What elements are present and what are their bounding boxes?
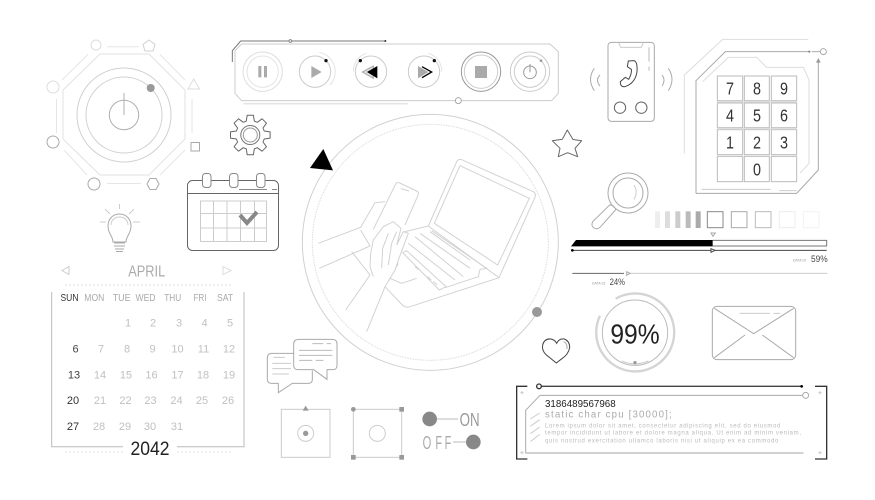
date grid: 2 <box>150 318 156 330</box>
forward button <box>408 53 442 87</box>
central laptop illustration <box>302 114 558 370</box>
99 percent gauge <box>596 293 674 371</box>
heart, gauge, envelope and text panel <box>517 293 827 459</box>
date grid: 15 <box>120 370 132 382</box>
bulb icon <box>100 204 140 252</box>
play button <box>299 52 335 87</box>
progress line 24%: 24% <box>610 277 625 287</box>
keys <box>717 76 797 182</box>
laptop <box>385 159 535 307</box>
date grid: 3 <box>176 318 182 330</box>
weekday headers <box>60 292 233 304</box>
key digits: 0 <box>753 159 761 179</box>
date grid: 16 <box>145 370 158 382</box>
rewind button <box>353 53 387 87</box>
date grid: 31 <box>171 421 183 433</box>
weekday headers: FRI <box>194 292 206 304</box>
date grid: 30 <box>144 421 156 433</box>
text panel: static char cpu [30000]; <box>545 410 672 421</box>
chat bubbles <box>267 339 337 393</box>
date grid: 17 <box>171 370 184 382</box>
phone icon <box>590 42 672 121</box>
year: 2042 <box>130 439 170 460</box>
key digits: 5 <box>753 106 761 126</box>
date grid: 21 <box>94 395 106 407</box>
off toggle: F <box>435 432 442 453</box>
date grid: 23 <box>144 395 157 407</box>
weekday headers: MON <box>84 292 104 304</box>
date grid: 7 <box>98 344 104 356</box>
handle square <box>351 407 404 460</box>
keypad panel <box>684 39 826 193</box>
key digits: 1 <box>726 133 734 153</box>
text panel <box>517 384 827 459</box>
date grid: 22 <box>119 395 132 407</box>
magnifier icon <box>592 173 648 229</box>
month heading: APRIL <box>128 264 165 280</box>
date grid: 8 <box>124 344 130 356</box>
date grid: 26 <box>222 395 234 407</box>
date grid: 13 <box>68 370 80 382</box>
on toggle: ON <box>460 409 480 430</box>
text panel: Lorem ipsum dolor sit amet, consectetur adipiscing elit, sed do eiusmod <box>545 423 780 429</box>
on toggle <box>422 409 480 430</box>
key digits: 6 <box>780 106 788 126</box>
date grid: 19 <box>223 370 235 382</box>
date grid: 10 <box>171 344 184 356</box>
heart icon <box>542 339 570 363</box>
date grid <box>67 318 235 433</box>
key digits: 2 <box>753 133 761 153</box>
gear icon <box>230 115 270 155</box>
date grid: 6 <box>72 344 79 356</box>
progress line 24%: DATA 03 <box>592 281 605 285</box>
progress line 24% <box>572 272 827 287</box>
check mark <box>240 212 257 223</box>
key digits: 7 <box>726 79 734 99</box>
99 percent gauge: 99% <box>610 318 660 349</box>
handset <box>620 61 637 87</box>
weekday headers: TUE <box>113 292 131 304</box>
date grid: 20 <box>67 395 79 407</box>
magnifier and progress <box>571 173 828 287</box>
star icon <box>552 130 582 157</box>
power button <box>510 52 550 91</box>
date grid: 25 <box>196 395 208 407</box>
date grid: 5 <box>227 318 233 330</box>
date grid: 9 <box>149 344 156 356</box>
weekday headers: WED <box>136 292 156 304</box>
rings <box>302 114 558 370</box>
envelope icon <box>712 306 796 360</box>
key digits: 4 <box>726 106 734 126</box>
key digits: 3 <box>780 133 788 153</box>
key digits: 8 <box>753 79 761 99</box>
date grid: 1 <box>125 318 131 330</box>
date grid: 27 <box>67 421 79 433</box>
target square <box>281 406 330 457</box>
stop button <box>461 52 501 91</box>
date grid: 14 <box>94 370 106 382</box>
date grid: 12 <box>223 344 235 356</box>
calendar icon <box>188 174 278 250</box>
chat bubbles, target squares and toggles <box>267 339 481 460</box>
progress bar 59%: DATA 02 <box>793 258 806 262</box>
text panel: tempor incididunt ut labore et dolore magna aliqua. Ut enim ad minim veniam, <box>545 431 801 437</box>
progress bar 59%: 59% <box>811 254 828 264</box>
off toggle: O <box>423 432 431 453</box>
weekday headers: SUN <box>60 292 78 304</box>
date grid: 11 <box>198 344 209 356</box>
shade swatches <box>655 211 819 228</box>
key digits <box>726 79 788 179</box>
date grid: 4 <box>201 318 208 330</box>
text panel: quis nostrud exercitation ullamco laboris nisi ut aliquip ex ea commodo <box>545 438 779 444</box>
text panel: 3186489567968 <box>545 399 616 410</box>
date grid: 18 <box>197 370 209 382</box>
progress bar 59% <box>571 240 828 264</box>
weekday headers: SAT <box>217 292 233 304</box>
hands <box>318 202 408 332</box>
weekday headers: THU <box>164 292 181 304</box>
key digits: 9 <box>780 79 788 99</box>
pause button <box>243 52 282 91</box>
power dial <box>47 40 200 190</box>
date grid: 29 <box>119 421 131 433</box>
date grid: 24 <box>170 395 183 407</box>
phone <box>373 183 418 229</box>
media control bar <box>232 40 558 104</box>
off toggle: F <box>445 432 451 453</box>
off toggle <box>423 432 481 453</box>
date grid: 28 <box>93 421 105 433</box>
month calendar <box>52 264 244 460</box>
month heading <box>62 264 231 280</box>
